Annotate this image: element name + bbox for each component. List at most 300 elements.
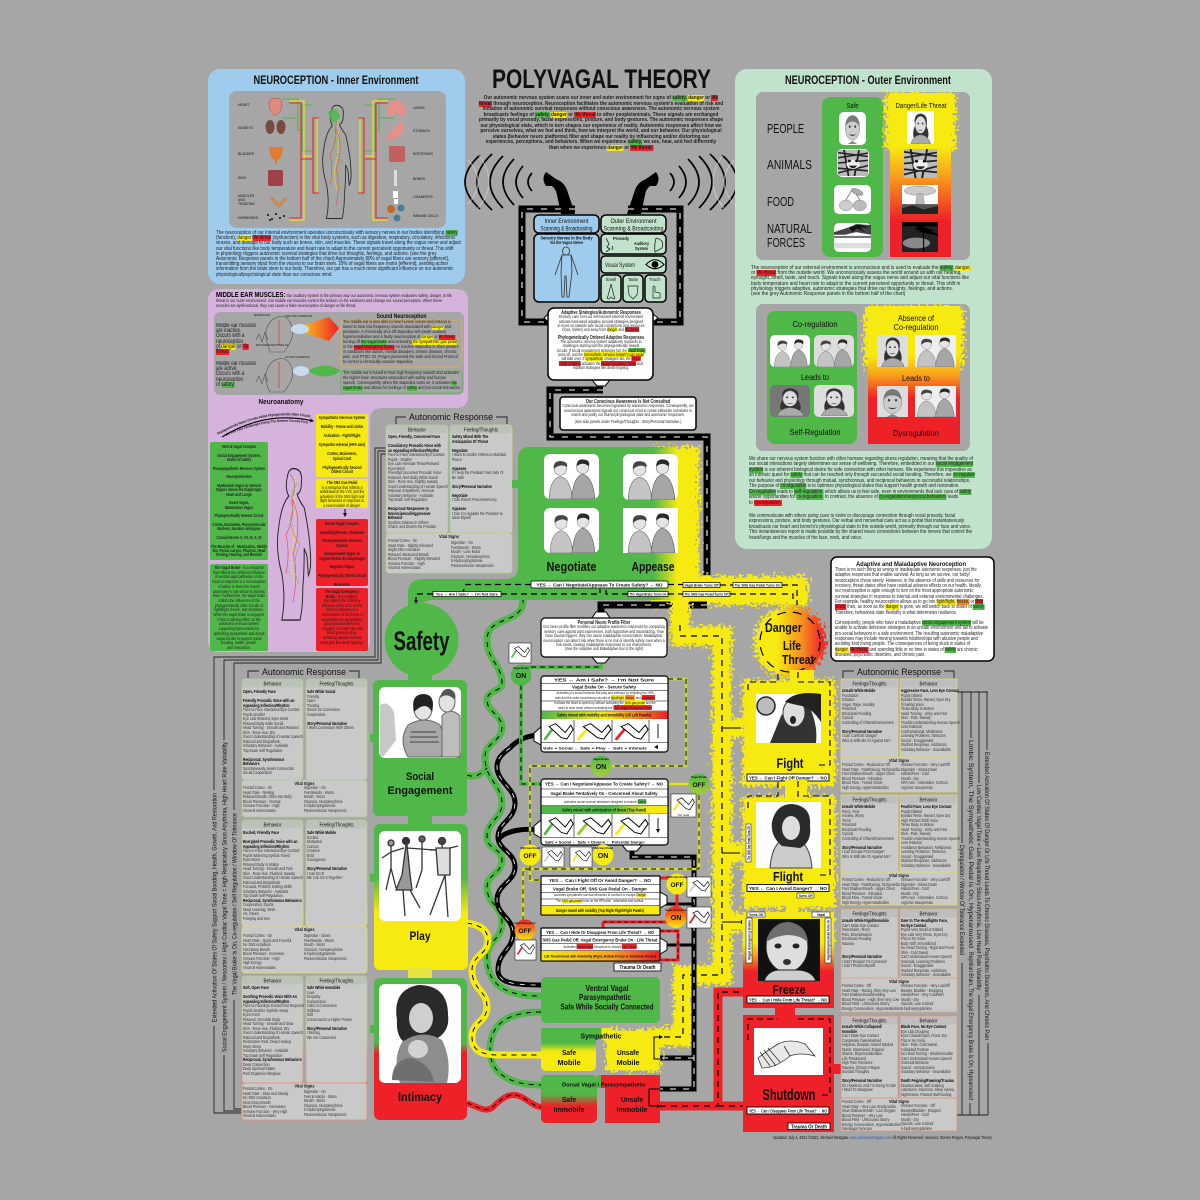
card: shutdown response: Life Threatened <box>842 1056 866 1060</box>
card: shutdown response: Nausea, Chronic Fatigue <box>842 1064 880 1070</box>
card: freeze response: Pupils Very Small or Dilated <box>901 927 943 932</box>
box: adaptive strategies: (food, shelter) and away from danger and life threat. <box>562 327 640 332</box>
card: fight response: High Energy, Hypermetabolism <box>842 784 889 790</box>
decision strip: top band: The SNS Gas Pedal Turns Off <box>684 592 729 596</box>
card: flight response: Avoidance Behaviors, Meltdowns <box>901 844 951 850</box>
card: fight response: HPA Axis - Adrenaline, Cortisol <box>901 780 948 785</box>
text: behavior top: Open, Friendly, Concerned Face <box>388 434 440 439</box>
box: adaptive strategies: vagal complex activates the vagal emergency brake and <box>559 361 643 366</box>
text: social connection paragraph: We share our nervous system function with other humans regarding stress regulation, meaning that the quality of <box>749 456 973 462</box>
circle: danger life threat: Danger <box>765 620 802 635</box>
text: intro paragraph: broadcasts feelings of safety, danger or life threat to other people/animals. These signals are exchanged <box>484 112 718 118</box>
box: sympathetic nervous system: Phylogenetically Second <box>323 465 361 470</box>
road: filter input <box>601 605 707 613</box>
column: absence of co-regulation leads to dysregulation: Dysregulation <box>893 429 939 438</box>
card: flight response: Voluntary Behavior - Unavailable <box>901 862 951 868</box>
card: freeze response: Blood Pressure - High, then Very Low <box>842 996 899 1002</box>
card: flight response: Blood Pressure - Elevated <box>842 890 882 896</box>
block: sympathetic safe and unsafe mobile: Unsafe <box>617 1048 639 1057</box>
card: freeze response: Frontal Cortex - Off <box>842 983 871 988</box>
panel: shutdown: YES ← Can I Disappear From Life Threat? → NO <box>749 1108 828 1114</box>
card: freeze response: Flat or No Voice <box>901 936 925 941</box>
block: dorsal vagal safe and unsafe immobile: Safe <box>562 1095 576 1104</box>
card: fight response: Irritation <box>842 697 854 702</box>
heading: autonomic response left: Autonomic Response <box>262 667 346 678</box>
card: fight response: Emotional Flooding <box>842 710 871 716</box>
card: intimacy response: Head Turning - Smooth and Slow <box>243 1021 293 1026</box>
panel: SNS gas pedal off vagal emergency brake on: YES ← Can I Hide Or Disappear From Life Threat? → NO <box>546 930 655 935</box>
box: adaptive strategies: turns off, and the sympathetic nervous system's gas pedal <box>558 352 644 357</box>
box: ventral vagal complex: The Muscles of - Mastication, Middle <box>211 544 267 549</box>
photo: mother and baby <box>392 985 449 1083</box>
vertical text: right extended activation: Extended Activation Of States Of Danger Or Life Threat Leads To Chronic Diseases, Psychiatric Disorders, And Chronic Pain <box>983 752 990 1040</box>
card: flight response: Skin - Pale, Sweaty <box>901 831 931 836</box>
panel: sound neuroception: turning off the vagal brake and activating the sympathetic gas pedal <box>343 340 457 345</box>
card: social engagement response: Feeling/Thoughts <box>320 682 354 688</box>
panel: outer environment scanning: Touch <box>649 277 661 282</box>
card: intimacy response: Eyes moist <box>243 1012 260 1017</box>
card group: top autonomic response: Visceral Homeostasis <box>388 565 421 570</box>
card: flight response: Digestion - Slows Down <box>901 882 937 886</box>
box: ventral vagal complex: Phylogenetically Newest Circuit <box>215 513 263 518</box>
panel: adaptive and maladaptive neuroception: our neuroception is agile enough to turn on the most appropriate autonomic <box>835 588 973 594</box>
circle: danger life threat <box>754 606 826 678</box>
card: shutdown response: Bowels/Bladder - Stopped <box>901 1108 941 1112</box>
panel: sound neuroception: predators. A chronically shut off stapedius will create auditory <box>343 330 446 335</box>
card: shutdown response: Skin - Pale, Cold Sweat <box>901 1042 937 1047</box>
labels: freeze top turn-off tags: Turns Off <box>798 894 813 898</box>
panel: sound neuroception: of danger or life <box>216 344 249 350</box>
card group: top autonomic response: Paraventricular Vasopressin <box>451 562 494 568</box>
card: shutdown response: Heart Rate - Very Low, Bradycardia <box>842 1104 896 1108</box>
arc arrow: phylogenetic order: Phylogenetically Newer Circuits Inhibit Phylogenetically Older Circuits <box>217 412 310 435</box>
card: play response: Excited, Friendly Face <box>243 830 279 835</box>
card: social engagement response: Blood Pressure - Normal <box>243 798 280 804</box>
photo: fighting man <box>757 693 821 743</box>
box: conscious awareness not consulted: match and justify our blurred physiological state and autonomic responses. <box>571 412 685 417</box>
box: ventral vagal complex: States of Safety <box>227 457 251 462</box>
circle: danger life threat: Threat <box>782 652 815 667</box>
label: social engagement <box>388 771 453 797</box>
card: shutdown response: Feelings/Thoughts <box>852 1018 887 1024</box>
card: flight response: Cynical <box>842 831 853 836</box>
card: play response: Vital Signs <box>294 927 315 932</box>
text: feelings top: Negotiate <box>452 492 468 498</box>
card: social engagement response: Visceral Homeostasis <box>243 808 276 812</box>
card group: right autonomic responses <box>841 667 979 1131</box>
card: fight response: Frontal Cortex - Reduced or Off <box>842 762 890 767</box>
panel: flight: YES ← Can I Avoid Danger? → NO <box>749 886 828 891</box>
panel: sound neuroception: MIDDLE EAR <box>254 313 270 317</box>
box: personal neuro profile filter: Our neuro profile filter modifies our adaptive autonomic responses by comparing <box>543 624 665 629</box>
card: flight response: Mouth - Dry <box>901 890 919 896</box>
diagram: organs and vagus nerve: IMMUNE CELLS <box>413 214 439 218</box>
box: ventral vagal complex: Smart Vagus, <box>229 500 249 505</box>
block: dorsal vagal safe and unsafe immobile <box>541 1075 660 1123</box>
text: feelings top: I Can Co-regulate the Predator to <box>452 510 503 516</box>
icon: sound waves right <box>670 154 737 210</box>
panel: safe vs danger cues: FOOD <box>767 194 794 209</box>
card: social engagement response: Behavior <box>264 682 282 688</box>
card: flight response: Trouble Understanding Human Speech <box>901 836 960 840</box>
panel: adaptive and maladaptive neuroception: There is no such thing as wrong or inadequate autonomic responses, just the <box>835 567 977 573</box>
text: feelings top: I Want to Soothe Others to Maintain <box>452 452 506 457</box>
diagram: organs and vagus nerve: STOMACH <box>413 129 430 133</box>
card: flight response: Fast Shallow Breath - Upper Chest <box>842 886 895 891</box>
box: dorsal vagal complex: Dorsal Vagal Complex <box>325 521 359 526</box>
text: outer neuroception description: eyesight, smell, taste, and touch. Signals travel along the vagus nerve and adjust our vital functions like <box>751 275 969 281</box>
block: dorsal vagal safe and unsafe immobile: Immobile <box>554 1105 584 1114</box>
text: behavior top: Charm and Disarm the Predator <box>388 524 436 529</box>
panel: social engagement <box>370 672 467 816</box>
card: intimacy response: Post Orgasmic Afterglow <box>243 1070 280 1076</box>
card: social engagement response: Head Turning - Smooth and Relaxed <box>243 725 299 730</box>
box: the vagal brake: vagal circuits to support social <box>216 636 262 641</box>
card: social engagement response: Safe While Social <box>307 689 335 694</box>
box: adaptive strategies: Sensory cues from our internal and external environment <box>559 314 643 319</box>
text: feelings top: Safety Mixed With The <box>452 434 488 439</box>
circle: safety: Safety <box>394 626 450 656</box>
text: inner neuroception description: (function), danger life threat (dysfunction) in the vital body systems, such as digestion, respiratory, circulatory, infections/ <box>216 235 455 241</box>
labels: freeze top turn-off tags <box>747 893 830 917</box>
card: shutdown response: Opioids, Low Cortisol <box>901 1121 933 1126</box>
card group: top autonomic response: 5-Hydroxytryptamine <box>451 558 483 563</box>
card: play response: Story/Personal Narrative <box>307 866 347 871</box>
box: ventral vagal complex: Mammalian Vagus <box>225 505 253 510</box>
text: social connection paragraph: our behavior and physiology through mutual, synchronous, and reciprocal behaviors in successful relationships. <box>749 478 970 484</box>
box: adaptive strategies: to move us towards safe social connections and resources <box>558 323 644 328</box>
box: sympathetic nervous system: Sympathetic Nervous System <box>319 415 365 420</box>
text: social connection paragraph: system is our inherent biological desire for safe connection with other humans. We experience this imperative as <box>749 467 972 473</box>
card: social engagement response: Story/Personal Narrative <box>307 720 347 726</box>
card: shutdown response: Frontal Cortex - Off <box>842 1099 871 1104</box>
panel: sound neuroception: Middle ear muscles <box>216 323 256 329</box>
card: shutdown response: Addictions, Insomnia, Sleep Apnea, <box>901 1087 955 1092</box>
decision strip: top band: The Vagal Brake Turns On <box>630 592 667 596</box>
label: play: Play <box>410 929 431 943</box>
text: social connection paragraph: to dysregulation. <box>749 500 782 506</box>
card: intimacy response: Rational and Empathetic <box>243 1034 280 1040</box>
card group: top autonomic response: Blood Pressure - Slightly Elevated <box>388 556 440 561</box>
text: behavior top: Good Understanding of Human Speech <box>388 484 448 488</box>
box: the vagal brake: autonomic nervous system <box>219 621 259 626</box>
panel: shutdown <box>743 1007 842 1132</box>
badge: vagal brake off: OFF <box>692 782 706 789</box>
card: intimacy response: Deep Connection, <box>243 1062 270 1066</box>
circle: danger life threat: Life <box>783 638 801 653</box>
panel: adaptive and maladaptive neuroception: unable to activate defensive strategies in an unsafe environment and fail to activate <box>835 625 988 631</box>
card: social engagement response: Open, Friendly Face <box>243 689 276 694</box>
text: cues paragraph: We communicate with others using cues to invite or discourage connection through vocal prosody, facial <box>749 513 955 519</box>
panel: adaptive and maladaptive neuroception: Consequently, people who have a maladaptive social engagement system will be <box>835 620 984 626</box>
card: social engagement response <box>242 679 387 817</box>
road: vagal brake interior links <box>521 602 699 960</box>
card: play response: I Can Do It! <box>307 870 324 876</box>
panel: sound neuroception: Occurs with a <box>216 333 244 339</box>
box: conscious awareness not consulted: (See side panels under Feelings/Thoughts - Story/Personal Narrative.) <box>575 419 681 424</box>
text: intro paragraph: states (behavior neuro platforms) filter and shape our reality by influencing and/or distorting our <box>493 134 709 140</box>
box: the vagal brake: that reflects the inhibitory influence <box>213 570 265 575</box>
card: play response: Immune Function - High <box>243 956 280 960</box>
card: play response: Safe While Mobile <box>307 830 336 835</box>
panel: sound neuroception: to correct a chronically inactive stapedius. <box>343 360 414 365</box>
heading: inner environment: NEUROCEPTION - Inner Environment <box>254 73 418 87</box>
card: play response: Oxytocin, Norepinephrine <box>304 946 343 952</box>
road: yellow serpentine <box>467 923 541 1055</box>
card: social engagement response: I Want Connection With Others <box>307 725 354 730</box>
card: social engagement response: Relaxed Breath, Often into Belly <box>243 794 292 799</box>
card: shutdown response: Energy Conservation, Hypometabolism <box>842 1122 901 1126</box>
card: flight response: Controlling of Others/Environment <box>842 836 894 840</box>
text: behavior top: Top Down Self Regulation <box>388 497 427 502</box>
card: freeze response: Body Stiff, Immobilized <box>901 940 936 946</box>
card: play response: Courageous <box>307 857 326 862</box>
text: feelings top: Appease <box>452 506 466 511</box>
vertical text: left social engagement: Social Engagement System / Neocortex / High Cardiac Vagal Tone = High Respiratory Sinus Arrythmia, High Heart Rate Variability <box>222 741 228 1052</box>
panel: flight: Flight <box>773 869 804 884</box>
road: green serpentine <box>467 600 541 1085</box>
card: social engagement response: 5-Hydroxytryptamine <box>304 803 336 808</box>
box: the vagal emergency brake <box>297 588 387 651</box>
panel: outer environment scanning: Visual System <box>605 262 635 269</box>
card: freeze response: Sound - Exaggerated <box>901 963 933 968</box>
panel: fight: YES ← Can I Fight Off Danger? → NO <box>749 776 828 780</box>
box: ventral vagal complex: Organs Above the Diaphragm: <box>216 487 262 492</box>
badge: vagal brake on top: Vagal Brake <box>513 666 529 670</box>
card: fight response: Unsafe While Mobile <box>842 688 875 693</box>
box: sympathetic nervous system: Cortex, Brainstem, <box>327 451 357 456</box>
panel: flight: The SNS Gas Pedal Turns Off <box>747 825 751 860</box>
card: flight response: Terror <box>842 818 851 822</box>
card: shutdown response: Vasovagal Syncope <box>842 1126 872 1131</box>
box: sympathetic nervous system: Sympatho-Adrenal (HPA axis) <box>319 442 365 447</box>
panel: sound neuroception: The middle ear is tuned to hear high frequency sounds and activates <box>343 371 459 376</box>
labels: freeze top turn-off tags: Vagal <box>817 913 825 917</box>
text: inner neuroception description: in physiology triggers autonomic survival strategies that drive our thoughts, feelings, and actions. (see the grey <box>216 251 437 257</box>
box: the vagal emergency brake: suppresses the sympathetic <box>321 617 362 622</box>
panel: intimacy <box>370 968 467 1120</box>
card: play response: Mouth - Moist <box>304 942 325 947</box>
panel: vagal brake on secure safety: axis and the older evolutionary circuits of fight/flight, freeze, and shutdown <box>555 694 655 700</box>
card: shutdown response: Numb, Depressed, Trapped <box>842 1046 884 1052</box>
panel: sound neuroception: BACKGROUND STIMULUS <box>256 343 289 347</box>
card: shutdown response: Eyes Closed/Open, Fixed, Dry <box>901 1033 947 1038</box>
text: feelings top <box>452 435 532 533</box>
box: the vagal brake: The Vagal Brake - is a metaphor <box>214 565 264 570</box>
icon: eye <box>646 260 664 269</box>
card group: top autonomic response: Oxytocin, Norepinephrine <box>451 554 490 558</box>
card: flight response: Arginine Vasopressin <box>901 900 933 904</box>
card: intimacy response: Relaxed, Immobile Body <box>243 1016 280 1022</box>
badge: vagal brake on middle <box>590 756 612 776</box>
card: social engagement response: Relaxed Body while Social <box>243 720 283 726</box>
block: sympathetic safe and unsafe mobile <box>541 1028 662 1071</box>
diagram: organs and vagus nerve: BONES <box>413 177 426 181</box>
text: feelings top: Story/Personal Narrative <box>452 484 492 488</box>
box: sympathetic nervous system: Activation - Fight/Flight <box>324 433 360 438</box>
card: shutdown response: Flat or No Voice <box>901 1038 925 1042</box>
card: shutdown response: Blood Pressure - Very Low <box>842 1112 882 1118</box>
heading: outer environment: NEUROCEPTION - Outer Environment <box>785 73 951 87</box>
card: fight response: Growling Voice <box>901 702 924 706</box>
card: flight response: Behavior <box>920 798 938 804</box>
badge: SNS gas pedal off and on: OFF <box>524 853 537 860</box>
panel: sound neuroception: The middle ear is less able to hear human voices and instead is <box>343 320 451 325</box>
card: social engagement response: Pupils Smaller <box>243 712 265 716</box>
card: social engagement response: Eye Lids Relaxed, Eyes Moist <box>243 716 288 721</box>
text: inner neuroception description: physiological/psychological state than our conscious mind. <box>216 272 333 278</box>
card: social engagement response: Voluntary Behavior - Available <box>243 743 288 748</box>
card: play response: We Can Do It Together! <box>307 875 343 880</box>
box: the vagal brake: level. Furthermore, the vagal brake <box>213 593 265 598</box>
card: intimacy response: Feet & Hands - Warm <box>304 1094 337 1098</box>
box: dorsal vagal complex: Phylogenetically Oldest Circuit <box>318 573 366 578</box>
badge: SNS gas pedal off and on: SNS Gas Pedal <box>520 846 540 850</box>
card: freeze response: I Can't Escape! I'm Cornered! <box>842 958 887 964</box>
card: freeze response: Story/Personal Narrative <box>842 954 882 959</box>
text: behavior top: Reciprocal Responses to <box>388 506 429 511</box>
card: social engagement response: Open <box>307 698 315 703</box>
card: freeze response: Bowels, Bladder - Emptying <box>901 988 943 992</box>
panel: inner environment scanning: Scanning & Broadcasting <box>540 226 593 232</box>
card: fight response: Vital Signs <box>889 758 909 763</box>
card: social engagement response: Top Down Self Regulation <box>243 748 282 752</box>
panel: safe vs danger cues: PEOPLE <box>767 121 804 136</box>
card: social engagement response: Immune Function - High <box>243 803 280 808</box>
card: intimacy response: Good Understanding of Human Speech <box>243 1030 303 1035</box>
box: the SNS gas pedal: withdrawal of the VVC and the <box>320 489 364 494</box>
card: freeze response: Hands/Feet - Very Cold/Wet <box>901 992 944 997</box>
card group: top autonomic response: Frontal Cortex - On <box>388 538 417 543</box>
diagram: organs and vagus nerve: LUNGS <box>413 106 425 110</box>
vertical text: right dysregulation: Dysregulation / Window Of Tolerance Exceeded <box>958 845 965 955</box>
box: the vagal brake: phylogenetically older circuits of <box>215 603 263 608</box>
card: shutdown response: Blood Field - Unfocused, Blurry <box>842 1117 889 1122</box>
card: fight response: Confrontational, Meltdowns <box>901 728 942 734</box>
card: shutdown response: Collapsed Posture <box>901 1046 929 1052</box>
card: social engagement response: Heart Rate - Resting <box>243 790 274 794</box>
text: feelings top: I Can Resort Peace/Harmony <box>452 497 497 502</box>
text: behavior top <box>388 435 468 533</box>
card: flight response: Tense Body In Motion <box>901 822 934 827</box>
badge: SNS gas pedal off right <box>666 874 711 897</box>
box: the vagal emergency brake: Brake - is a metaphor <box>326 594 358 599</box>
badge: vagal brake on top: ON <box>516 673 526 680</box>
text: inner neuroception description: information from the brain stem to our body. Therefore, our gut has a much more significant influence on our autonomic <box>216 266 453 272</box>
photo: dancers <box>382 836 458 917</box>
label: trauma or death right: Trauma Or Death <box>791 1124 827 1130</box>
card: play response: Curious <box>307 844 319 848</box>
panel: adaptive and maladaptive neuroception: Adaptive and Maladaptive Neuroception <box>856 562 966 568</box>
text: intro paragraph: experiences, perceptions, and behaviors. When we experience safety, we see, hear, and feel differently <box>486 139 716 145</box>
diagram: organs and vagus nerve: INTESTINES <box>413 152 434 156</box>
text: outer neuroception description: or life threat from the outside world. We unconsciously assess the world around us with our hearing, <box>751 270 962 276</box>
card: play response: Foreplay and Sex <box>243 916 270 920</box>
box: personal neuro profile filter: have trauma triggers, they can cause maladaptive neuroception. Maladaptive <box>546 633 662 638</box>
card: shutdown response: Eye Lids Drooping <box>901 1028 929 1034</box>
card: shutdown response: Nightmares, Passed Out/Fainting <box>901 1092 951 1096</box>
badge: vagal brake off: Vagal Brake <box>691 775 707 779</box>
text: feelings top: Be Safe <box>452 474 464 480</box>
text: social connection paragraph: The purpose of co-regulation is to optimize physiological states that support health growth and restoration. <box>749 483 960 489</box>
panel: sound neuroception: or the vagal emergency brake. An inactive stapedius is often present <box>343 345 459 350</box>
panel: safe vs danger cues: NATURAL <box>767 221 812 236</box>
card: intimacy response: Love <box>307 990 314 994</box>
box: the SNS gas pedal: is a metaphor that reflects a <box>322 485 362 490</box>
panel: sound neuroception: neuroception <box>216 339 243 345</box>
photo: friends talking <box>380 689 460 757</box>
card: intimacy response: Vital Signs <box>294 1084 315 1088</box>
text: inner neuroception description: Autonomic Response panels in the bottom half of the chart) Approximately 80% of vagal fibers are sensory [afferent], <box>216 256 449 262</box>
panel: sound neuroception: threat. <box>216 349 229 355</box>
panel: sound neuroception: ACTIVE STAPEDIUS <box>285 355 310 359</box>
panel: sound neuroception: are active. <box>216 366 238 372</box>
card: play response: Art, Dance <box>243 911 259 916</box>
box: ventral vagal complex: Neuroprotection <box>226 474 252 479</box>
panel: sound neuroception: INACTIVE STAPEDIUS <box>285 314 312 318</box>
card: intimacy response: Oxytocin, Norepinephrine <box>304 1102 343 1108</box>
card: fight response: Arginine Vasopressin <box>901 784 933 790</box>
panel: sound neuroception <box>214 312 499 395</box>
box: sympathetic nervous system <box>297 414 387 477</box>
card: social engagement response: Social Cooperation <box>243 770 272 775</box>
card: fight response: Feelings/Thoughts <box>852 682 887 688</box>
card: intimacy response: Safe While Immobile <box>307 985 340 990</box>
road: black serpentine <box>497 735 541 985</box>
box: personal neuro profile filter: risk exists, causing maladaptive responses to our environment. <box>556 642 652 647</box>
badge: vagal brake on middle: ON <box>596 764 606 771</box>
box: adaptive strategies: The autonomic nervous system adaptively responds to <box>560 339 642 344</box>
panel: adaptive and maladaptive neuroception: Therefore, behavioral state flexibility is what determines resilience. <box>835 610 957 616</box>
diagram: organs and vagus nerve: HEART <box>238 103 249 107</box>
card: play response: Visceral Homeostasis <box>243 964 276 970</box>
panel: adaptive and maladaptive neuroception: neuroception chose wisely. However, in the absence of skills and resources for <box>835 578 979 584</box>
card: flight response: Less Rational <box>901 840 922 845</box>
card: play response: Reciprocal, Synchronous Behaviors <box>243 898 302 902</box>
text: intro paragraph: initiation of autonomic survival responses without conscious awareness. The autonomic nervous system <box>483 106 719 112</box>
text: intro paragraph: perceive ourselves, what we feel and think, how we interpret the world, and our behavior. Our physiological <box>480 128 722 134</box>
text: inner neuroception description: our vital functions like body temperature and heart rate to adapt to the current perceived opportunity or threat. This shift <box>216 246 453 252</box>
card: play response: Feet/Hands - Warm <box>304 938 334 942</box>
figure: body with nervous system <box>277 469 311 620</box>
text: outer neuroception description: (see the grey Autonomic Response panels in the bottom half of the chart) <box>751 291 905 297</box>
card: shutdown response: Story/Personal Narrative <box>842 1078 882 1083</box>
panel: outer environment scanning: Scanning & Broadcasting <box>604 226 664 232</box>
card: fight response: Voluntary Behavior - Unavailable <box>901 746 951 752</box>
card: freeze response: Fast Shallow Breath/Holding <box>842 992 885 997</box>
card: intimacy response: Reciprocal, Synchronous Behaviors <box>243 1057 302 1062</box>
card: social engagement response: Appealing Inflection/Rhythm <box>243 702 289 708</box>
text: social connection paragraph: an intrinsic quest for safety that can be reached only through successful social bonding. Therefore, we co-regulate <box>749 472 975 478</box>
text: intro paragraph: primarily by vocal prosody, facial expressions, posture, and body gestures. The autonomic responses shape <box>479 117 723 123</box>
label: trauma or death center: Trauma Or Death <box>620 965 656 971</box>
box: ventral vagal complex: Cortex, Brainstem, Paraventricular <box>212 522 266 527</box>
card: fight response: I Can Confront Danger! <box>842 733 877 738</box>
panel: neuroception outer environment <box>735 69 1034 549</box>
text: feelings top: If I Help the Predator Feel Safe I'll <box>452 470 503 475</box>
card group: top autonomic response: Slight SNS Activation <box>388 547 420 552</box>
box: the vagal emergency brake: The Vagal Emergency <box>325 589 359 594</box>
badge: SNS gas pedal off right: OFF <box>670 882 684 889</box>
card: fight response: Skin - Pale, Sweaty <box>901 715 931 720</box>
diagram: organs and vagus nerve: HORMONES <box>238 216 259 220</box>
block: sympathetic safe and unsafe mobile: Mobile <box>558 1058 580 1067</box>
box: conscious awareness not consulted: Conscious awareness becomes bypassed by autonomic responses. Consequently, our <box>562 403 694 408</box>
card: flight response: Immune Function - Very Low/Off <box>901 877 950 882</box>
box: conscious awareness not consulted: Our Conscious Awareness Is Not Consulted <box>586 399 670 405</box>
box: the vagal brake: of safety. It slows the heart's <box>218 584 260 589</box>
card: freeze response: Immune Function - Very Low/Off <box>901 983 950 988</box>
